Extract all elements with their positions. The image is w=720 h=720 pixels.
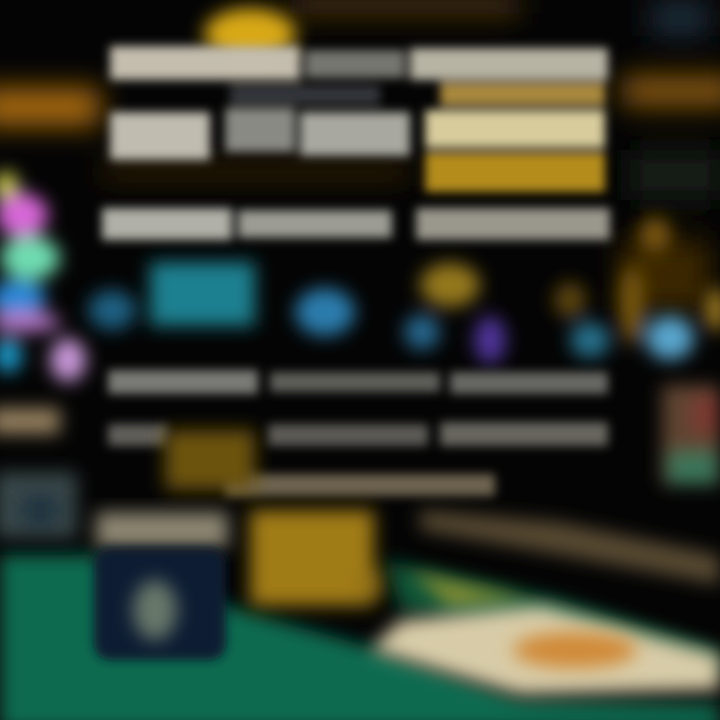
icon: gold box <box>165 430 382 606</box>
card: cream playing card on table <box>370 605 720 695</box>
table edge: wooden rail <box>420 510 720 585</box>
text block: blurred body lines <box>108 370 608 496</box>
icon: gold coin at top <box>204 8 296 60</box>
picture at right edge <box>662 385 720 485</box>
icon: navy dice <box>94 512 228 660</box>
table: green felt <box>0 555 720 720</box>
background: room and shelves <box>0 0 720 310</box>
subheading: blurred second line <box>102 208 610 240</box>
icon: rainbow lamp at left <box>0 172 86 382</box>
left shelf objects <box>0 408 77 538</box>
row of glowing lights <box>88 217 720 364</box>
heading: blurred title <box>110 46 608 192</box>
